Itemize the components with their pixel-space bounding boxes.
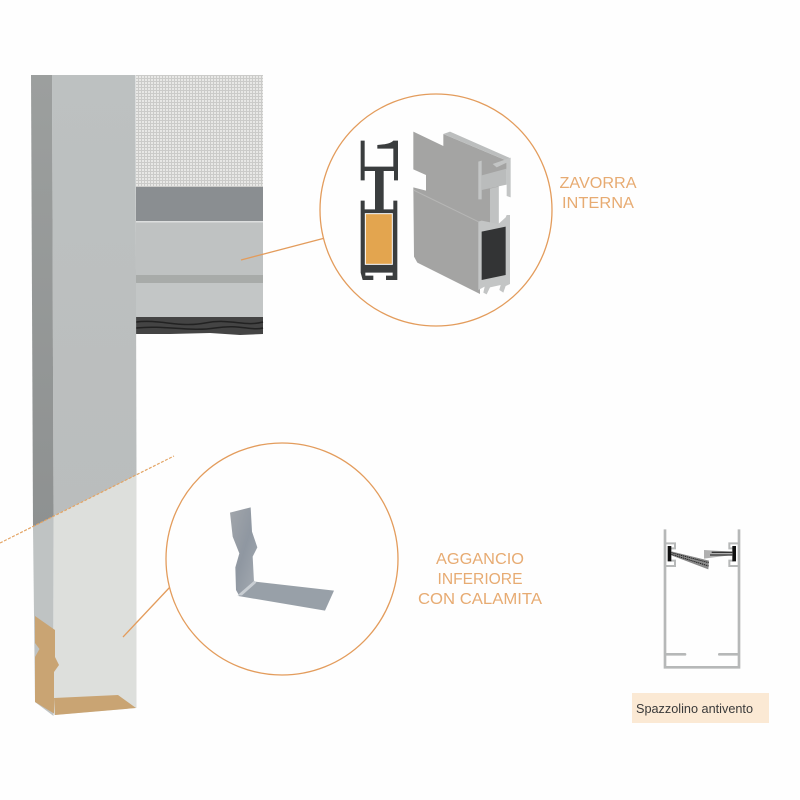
label box: spazzolino antivento: Spazzolino antivento: [636, 702, 753, 716]
dashed section line: [0, 456, 174, 543]
lower end body: [478, 215, 510, 294]
brush holders: [666, 543, 738, 566]
callout line: zavorra: [241, 238, 325, 260]
callout line: aggancio: [123, 587, 170, 637]
orange ballast: [365, 214, 392, 264]
post translucent lower side: [33, 516, 54, 716]
label box: spazzolino antivento: [632, 693, 769, 723]
label: zavorra interna: ZAVORRA: [560, 175, 637, 192]
windproof brush section diagram: [665, 529, 739, 667]
dark chamber: [482, 227, 506, 280]
weighted bottom bar: [136, 221, 263, 317]
web: [490, 187, 499, 225]
profile cross-section: [361, 141, 398, 280]
dark band under mesh: [136, 187, 263, 221]
3D aluminium profile: [413, 132, 511, 294]
post translucent lower front: [54, 475, 136, 715]
label: aggancio inferiore: AGGANCIO: [436, 551, 524, 568]
black magnets: [668, 546, 736, 561]
mesh screen: [136, 75, 263, 187]
upper end strips and hook: [478, 158, 511, 199]
tan inner side part: [35, 616, 59, 714]
metal clip: [230, 507, 334, 611]
left bristles: [671, 551, 709, 569]
clip upright: [230, 507, 257, 596]
clip base: [238, 582, 334, 611]
dark section outline: [361, 141, 398, 280]
post front face: [52, 75, 136, 516]
post side face: [31, 75, 54, 527]
label: zavorra interna: INTERNA: [562, 195, 634, 212]
profile long face: [413, 132, 507, 294]
tan bottom part: [54, 695, 136, 715]
right bristles: [704, 550, 732, 559]
photo: window frame with mesh: [31, 75, 263, 716]
label: zavorra interna: [560, 175, 637, 212]
circle: aggancio inferiore: [166, 443, 398, 675]
inner stubs: [667, 650, 737, 658]
brush strip: [136, 317, 263, 335]
label: aggancio inferiore: CON CALAMITA: [418, 591, 542, 608]
label: aggancio inferiore: [418, 551, 542, 608]
label: aggancio inferiore: INFERIORE: [438, 571, 522, 588]
H block: [482, 169, 507, 190]
outer U frame: [665, 529, 739, 667]
top ledge: [443, 132, 511, 161]
circle: zavorra interna: [320, 94, 552, 326]
